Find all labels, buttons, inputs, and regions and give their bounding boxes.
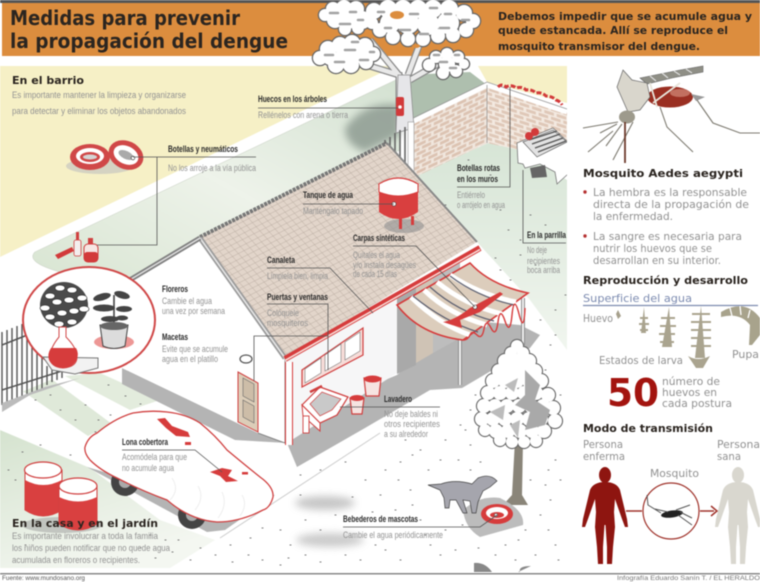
label: floreros: Cambie el agua <box>162 296 212 306</box>
label: puertas y ventanas: mosquiteros <box>267 318 308 328</box>
label: lavadero: otros recipientes <box>384 419 440 429</box>
number of eggs: huevos en <box>662 387 717 399</box>
label: carpas sintéticas: y/o instala desagües <box>353 260 416 270</box>
life cycle: egg, larvae and pupa <box>583 306 760 368</box>
door <box>238 355 258 432</box>
label: floreros: Floreros <box>162 284 188 294</box>
mosquito facts list: La hembra es la responsable <box>593 187 747 199</box>
mosquito facts list: la enfermedad. <box>593 211 673 223</box>
dog with bowl <box>428 476 523 537</box>
transmission diagram: Persona <box>717 439 760 451</box>
label: huecos en los árboles: Huecos en los árboles <box>258 94 327 104</box>
label: botellas rotas en los muros: Botellas rotas <box>457 163 500 173</box>
label: canaleta: Límpiela bien, limpia <box>267 271 328 281</box>
background tree with crown <box>313 0 480 133</box>
number of eggs: cada postura <box>662 398 732 410</box>
tank on the roof <box>379 178 424 233</box>
red gutter and downspout <box>285 248 480 445</box>
transmission diagram: Mosquito <box>650 468 699 480</box>
grill <box>517 128 568 184</box>
label: botellas rotas en los muros <box>457 163 505 210</box>
label: canaleta: Canaleta <box>267 255 296 265</box>
label: botellas rotas en los muros: Entiérrelo <box>457 190 485 200</box>
label: puertas y ventanas: Puertas y ventanas <box>267 292 328 302</box>
number of eggs: 50 <box>607 371 659 415</box>
label: en la parrilla <box>527 230 567 275</box>
brick wall <box>409 82 567 177</box>
source credit: Fuente: www.mundosano.org <box>2 575 85 582</box>
text: En la casa y en el jardín: Es importante involucrar a toda la familia <box>12 531 158 541</box>
label: lona cobertora: no acumule agua <box>122 463 174 473</box>
transmission diagram: sana <box>717 451 741 463</box>
transmission heading: Modo de transmisión <box>583 422 713 435</box>
text: En el barrio: Es importante mantener la limpieza y organizarse <box>12 90 186 100</box>
label: en la parrilla: boca arriba <box>527 265 560 275</box>
header intro text: Debemos impedir que se acumule agua y <box>498 11 752 23</box>
mosquito facts list: directa de la propagación de <box>593 199 749 211</box>
ground specks <box>8 160 566 565</box>
label: puertas y ventanas <box>267 292 328 328</box>
transmission diagram <box>582 439 760 564</box>
gate beside the tree <box>385 122 414 177</box>
water surface label and line: Superficie del agua <box>583 293 692 305</box>
text: En la casa y en el jardín <box>12 518 170 565</box>
reproduction heading: Reproducción y desarrollo <box>583 274 748 287</box>
label: huecos en los árboles <box>258 94 348 120</box>
title: la propagación del dengue <box>10 29 288 53</box>
number of eggs: número de <box>662 376 720 388</box>
label: botellas rotas en los muros: en los muros <box>457 174 498 184</box>
foreground tree <box>475 340 562 505</box>
text: En la casa y en el jardín: En la casa y en el jardín <box>12 518 158 530</box>
text: En el barrio: para detectar y eliminar los objetos abandonados <box>12 106 186 116</box>
label: lona cobertora: Lona cobertora <box>122 437 169 447</box>
label: en la parrilla: No deje <box>527 245 547 255</box>
label: lavadero <box>384 394 440 439</box>
label: lavadero: a su alrededor <box>384 429 428 439</box>
label: macetas: Evite que se acumule <box>162 344 228 354</box>
mosquito facts list: La sangre es necesaria para <box>593 231 742 243</box>
circle with flower vase and potted plant <box>23 267 155 374</box>
label: huecos en los árboles: Rellénelos con arena o tierra <box>258 110 348 120</box>
white side panel <box>567 56 760 573</box>
number of eggs <box>607 371 732 415</box>
label: macetas <box>162 332 228 364</box>
red bottles on wall <box>498 85 562 105</box>
label: floreros: una vez por semana <box>162 306 225 316</box>
label: puertas y ventanas: Colóquele <box>267 308 299 318</box>
label: bebederos de mascotas: Cambie el agua periódicamente <box>343 530 443 540</box>
windows <box>302 328 363 387</box>
life cycle: egg, larvae and pupa: Huevo <box>583 313 613 325</box>
label: tanque de agua: Manténgalo tapado <box>303 206 363 216</box>
label: bebederos de mascotas: Bebederos de mascotas <box>343 514 418 524</box>
mosquito heading: Mosquito Aedes aegypti <box>583 167 743 180</box>
life cycle: egg, larvae and pupa: Estados de larva <box>599 355 683 367</box>
covered car <box>85 411 275 532</box>
tyres <box>66 135 148 175</box>
bottles on lawn <box>55 232 98 262</box>
title <box>10 6 288 53</box>
label: en la parrilla: recipientes <box>527 256 560 266</box>
label: botellas y neumáticos <box>168 144 256 173</box>
mosquito facts list: nutrir los huevos que se <box>593 243 712 255</box>
bottom rule <box>0 573 760 574</box>
label: macetas: Macetas <box>162 332 188 342</box>
infographic credit: Infografía Eduardo Sanín T. / EL HERALDO <box>617 575 760 582</box>
text: En el barrio: En el barrio <box>12 75 84 87</box>
mosquito facts list: desarrollan en su interior. <box>593 255 721 267</box>
leader lines <box>97 87 566 527</box>
fence <box>2 322 80 412</box>
text: En la casa y en el jardín: acumulada en floreros o recipientes. <box>12 555 140 565</box>
header intro text <box>498 11 752 53</box>
label: en la parrilla: En la parrilla <box>527 230 567 240</box>
label: botellas rotas en los muros: o arrójelo en agua <box>457 200 505 210</box>
red drums <box>22 462 102 533</box>
transmission diagram: Persona <box>583 439 623 451</box>
label: bebederos de mascotas <box>343 514 443 540</box>
label: tanque de agua: Tanque de agua <box>303 190 354 200</box>
header banner <box>0 0 760 56</box>
label: carpas sintéticas: de cada 15 días <box>353 269 397 279</box>
mosquito illustration <box>583 66 760 163</box>
title: Medidas para prevenir <box>10 6 240 30</box>
label: tanque de agua <box>303 190 363 216</box>
roof with tiles <box>128 143 477 358</box>
header intro text: mosquito transmisor del dengue. <box>498 41 700 53</box>
label: floreros <box>162 284 225 316</box>
label: lona cobertora: Acomódela para que <box>122 452 187 462</box>
house walls <box>122 240 460 443</box>
label: carpas sintéticas <box>353 233 416 279</box>
label: lavadero: Lavadero <box>384 394 412 404</box>
text: En el barrio <box>12 75 186 116</box>
header intro text: quede estancada. Allí se reproduce el <box>498 25 728 37</box>
label: lona cobertora <box>122 437 187 473</box>
label: canaleta <box>267 255 328 281</box>
sink and buckets <box>302 376 381 433</box>
label: botellas y neumáticos: No los arroje a la vía pública <box>168 163 256 173</box>
label: botellas y neumáticos: Botellas y neumáticos <box>168 144 238 154</box>
plant at bottom edge <box>474 563 531 572</box>
life cycle: egg, larvae and pupa: Pupa <box>732 349 759 361</box>
text: En la casa y en el jardín: los niños pueden notificar que no quede agua <box>12 543 170 553</box>
label: lavadero: No deje baldes ni <box>384 409 438 419</box>
transmission diagram: enferma <box>583 451 625 463</box>
label: carpas sintéticas: Carpas sintéticas <box>353 233 405 243</box>
label: carpas sintéticas: Quítales el agua <box>353 250 400 260</box>
mosquito facts list <box>583 187 749 267</box>
awning and posts <box>397 263 528 385</box>
scene background: ground, yellow field and lawns <box>0 66 567 568</box>
grey ground shadow of the house <box>122 320 540 467</box>
label: macetas: agua en el platillo <box>162 354 218 364</box>
